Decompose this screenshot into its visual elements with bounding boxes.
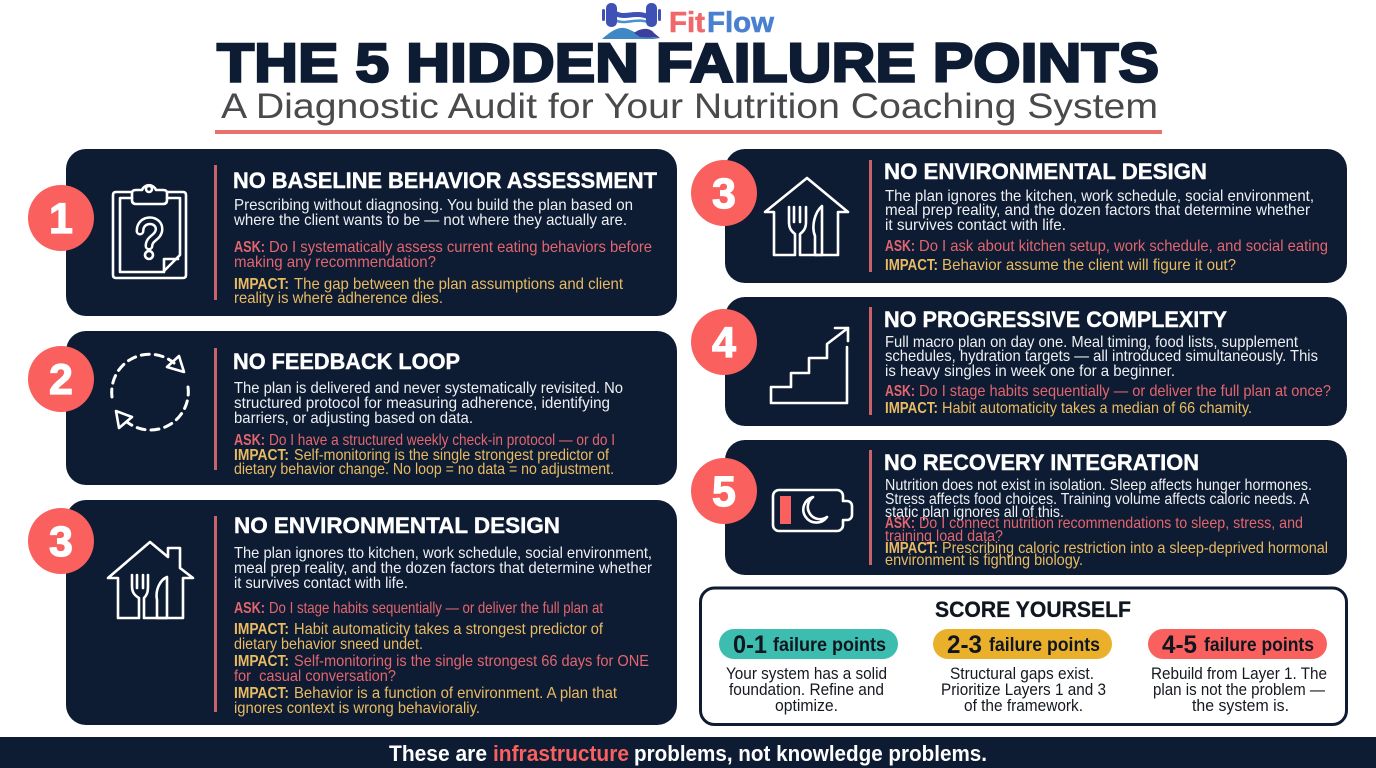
impact: behavior: Behavior is a function of environment. A plan that bbox=[294, 685, 618, 702]
body: The plan is delivered and never systematically revisited. No bbox=[234, 380, 623, 397]
body: it survives contact with life. bbox=[885, 217, 1066, 234]
ask: Do I ask about kitchen setup, work schedule, and social eating bbox=[919, 238, 1328, 255]
number badge 4 bbox=[691, 309, 757, 375]
impact: The gap between the plan assumptions and client bbox=[294, 276, 624, 293]
body bbox=[885, 477, 1312, 521]
number badge 2: 2 bbox=[49, 356, 73, 404]
number badge 3: 3 bbox=[49, 518, 73, 566]
score tier 0-1 bbox=[719, 629, 898, 715]
score tier 2-3: of the framework. bbox=[964, 696, 1083, 715]
impact: IMPACT: bbox=[885, 540, 938, 557]
body: meal prep reality, and the dozen factors that determine whether bbox=[234, 560, 653, 577]
heading: NO RECOVERY INTEGRATION bbox=[884, 450, 1199, 475]
ask bbox=[885, 515, 1303, 545]
number badge 1: 1 bbox=[49, 195, 73, 243]
ask: ASK: bbox=[885, 383, 915, 400]
icon: rising stairs with arrow bbox=[771, 328, 848, 403]
heading: NO PROGRESSIVE COMPLEXITY bbox=[884, 307, 1227, 332]
impact bbox=[234, 276, 624, 307]
impact: dietary behavior change. No loop = no data = no adjustment. bbox=[234, 461, 614, 478]
ask: Do I stage habits sequentially — or deliver the full plan at once? bbox=[919, 383, 1331, 400]
panel 3 left: no environmental design bbox=[28, 500, 677, 725]
logo wordmark: Fit bbox=[669, 7, 705, 39]
ask: ASK: bbox=[234, 600, 265, 617]
impact: self-monitoring: IMPACT: bbox=[234, 653, 289, 670]
score tier 0-1: Your system has a solid bbox=[726, 664, 887, 683]
impact: behavior bbox=[234, 685, 618, 717]
body: Prescribing without diagnosing. You build the plan based on bbox=[234, 197, 633, 214]
icon: clipboard with question mark bbox=[113, 185, 186, 278]
impact: Prescribing caloric restriction into a sleep-deprived hormonal bbox=[942, 540, 1328, 557]
score tier 4-5: 4-5 bbox=[1162, 631, 1197, 659]
impact bbox=[234, 447, 614, 478]
impact: habit automaticity bbox=[234, 621, 604, 653]
footer banner bbox=[0, 737, 1376, 768]
impact: habit automaticity: dietary behavior sneed undet. bbox=[234, 636, 423, 653]
number badge 3 bbox=[28, 508, 94, 574]
score tier 4-5: plan is not the problem — bbox=[1153, 680, 1325, 699]
score tier 4-5 bbox=[1148, 629, 1327, 715]
number badge 1 bbox=[28, 185, 94, 251]
panel: score yourself bbox=[700, 588, 1346, 724]
subtitle: A Diagnostic Audit for Your Nutrition Coaching System bbox=[221, 87, 1158, 126]
body: it survives contact with life. bbox=[234, 575, 408, 592]
panel 2: no feedback loop bbox=[28, 331, 677, 485]
score tier 0-1: foundation. Refine and bbox=[729, 680, 884, 699]
ask: ASK: bbox=[885, 515, 915, 532]
logo: FitFlow: Flow bbox=[707, 7, 774, 39]
score tier 0-1: 0-1 bbox=[733, 631, 767, 659]
impact: IMPACT: bbox=[885, 400, 938, 417]
body: Full macro plan on day one. Meal timing, food lists, supplement bbox=[885, 334, 1299, 351]
body bbox=[233, 197, 633, 229]
icon: dashed loop arrows bbox=[112, 354, 188, 430]
footer banner: problems, not knowledge problems. bbox=[634, 741, 987, 766]
body bbox=[234, 380, 623, 427]
ask: Do I systematically assess current eating behaviors before bbox=[269, 239, 652, 256]
body: where the client wants to be — not where they actually are. bbox=[233, 212, 627, 229]
score tier 2-3: 2-3 bbox=[947, 631, 982, 659]
number badge 5: 5 bbox=[712, 468, 736, 516]
ask: ASK: bbox=[234, 432, 265, 449]
number badge 2 bbox=[28, 346, 94, 412]
title: THE 5 HIDDEN FAILURE POINTS bbox=[217, 32, 1159, 94]
score heading: SCORE YOURSELF bbox=[935, 597, 1131, 622]
score tier 2-3: Structural gaps exist. bbox=[950, 664, 1094, 683]
number badge 3: 3 bbox=[712, 170, 736, 218]
footer banner: These are bbox=[389, 741, 487, 766]
ask: Do I connect nutrition recommendations to sleep, stress, and bbox=[919, 515, 1303, 532]
body: Stress affects food choices. Training volume affects caloric needs. A bbox=[885, 491, 1309, 508]
heading: NO ENVIRONMENTAL DESIGN bbox=[234, 513, 560, 538]
number badge 4: 4 bbox=[712, 319, 736, 367]
impact: environment is fighting biology. bbox=[885, 552, 1083, 569]
body: The plan ignores the kitchen, work schedule, social environment, bbox=[885, 188, 1314, 205]
number badge 5 bbox=[691, 458, 757, 524]
score tier 2-3: failure points bbox=[989, 635, 1100, 656]
body: The plan ignores tto kitchen, work schedule, social environment, bbox=[234, 545, 652, 562]
impact: Behavior assume the client will figure it out? bbox=[942, 257, 1236, 274]
body: static plan ignores all of this. bbox=[885, 504, 1064, 521]
ask: ASK: bbox=[885, 238, 915, 255]
impact: reality is where adherence dies. bbox=[234, 290, 443, 307]
panel 5: no recovery integration bbox=[691, 440, 1347, 575]
panel 1: no baseline behavior assessment bbox=[28, 149, 677, 316]
body bbox=[885, 188, 1314, 234]
score tier 4-5: the system is. bbox=[1192, 696, 1289, 715]
icon: house with fork and knife bbox=[108, 542, 193, 618]
impact: IMPACT: bbox=[234, 276, 289, 293]
impact: habit automaticity: IMPACT: bbox=[234, 621, 289, 638]
impact: Self-monitoring is the single strongest predictor of bbox=[294, 447, 609, 464]
score tier 4-5: failure points bbox=[1204, 635, 1314, 656]
panel 3 right: no environmental design bbox=[691, 149, 1347, 283]
icon: low battery with moon bbox=[773, 490, 852, 531]
body: schedules, hydration targets — all introduced simultaneously. This bbox=[885, 348, 1318, 365]
impact: self-monitoring bbox=[234, 653, 649, 685]
body: is heavy singles in week one for a beginner. bbox=[885, 363, 1175, 380]
impact: behavior: ignores context is wrong behavioraliy. bbox=[234, 700, 480, 717]
ask: Do I stage habits sequentially — or deliver the full plan at bbox=[269, 600, 603, 617]
score tier 0-1: optimize. bbox=[775, 696, 838, 715]
impact: IMPACT: bbox=[234, 447, 289, 464]
body: meal prep reality, and the dozen factors that determine whether bbox=[885, 202, 1311, 219]
body bbox=[234, 545, 653, 592]
ask: training load data? bbox=[885, 528, 1003, 545]
heading: NO FEEDBACK LOOP bbox=[233, 349, 460, 374]
body: Nutrition does not exist in isolation. Sleep affects hunger hormones. bbox=[885, 477, 1312, 494]
score tier 2-3: Prioritize Layers 1 and 3 bbox=[941, 680, 1106, 699]
ask: Do I have a structured weekly check-in protocol — or do I bbox=[269, 432, 615, 449]
score tier 0-1: failure points bbox=[773, 635, 886, 656]
impact: habit automaticity: Habit automaticity takes a strongest predictor of bbox=[294, 621, 604, 638]
icon: house with fork and knife bbox=[765, 178, 848, 255]
ask bbox=[234, 239, 652, 271]
body bbox=[885, 334, 1318, 380]
ask: ASK: bbox=[234, 239, 265, 256]
number badge 3 bbox=[691, 160, 757, 226]
impact bbox=[885, 540, 1328, 569]
logo: FitFlow bbox=[602, 3, 774, 39]
heading: NO ENVIRONMENTAL DESIGN bbox=[884, 159, 1207, 184]
impact: IMPACT: bbox=[885, 257, 938, 274]
impact: behavior: IMPACT: bbox=[234, 685, 289, 702]
impact: self-monitoring: for casual conversation? bbox=[234, 668, 396, 685]
score tier 4-5: Rebuild from Layer 1. The bbox=[1151, 664, 1327, 683]
score tier 2-3 bbox=[933, 629, 1112, 715]
ask: making any recommendation? bbox=[234, 254, 436, 271]
impact: self-monitoring: Self-monitoring is the single strongest 66 days for ONE bbox=[294, 653, 649, 670]
body: barriers, or adjusting based on data. bbox=[234, 410, 473, 427]
impact: Habit automaticity takes a median of 66 chamity. bbox=[942, 400, 1252, 417]
body: structured protocol for measuring adherence, identifying bbox=[234, 395, 610, 412]
footer banner: infrastructure bbox=[493, 741, 629, 766]
heading: NO BASELINE BEHAVIOR ASSESSMENT bbox=[233, 168, 658, 193]
icon: dumbbell and wave bbox=[602, 3, 661, 39]
panel 4: no progressive complexity bbox=[691, 297, 1347, 426]
